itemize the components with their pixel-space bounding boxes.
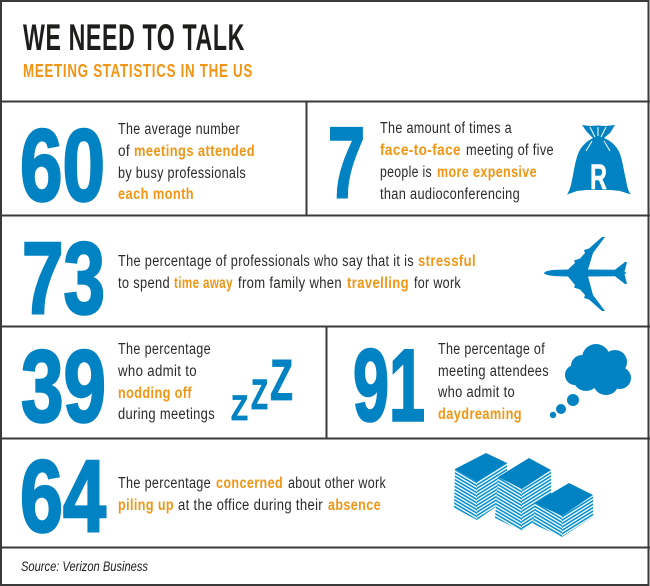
text block: The percentage of: [438, 341, 545, 358]
text block: concerned: [216, 475, 283, 492]
text block: absence: [328, 497, 381, 514]
text block: from family when: [238, 275, 342, 292]
text block: nodding off: [118, 385, 192, 402]
number 64: 64: [20, 440, 106, 554]
title: WE NEED TO TALK: [23, 17, 245, 58]
icon: thought cloud: [550, 344, 631, 418]
text block: [380, 120, 554, 203]
source note: Source: Verizon Business: [21, 558, 148, 574]
text block: [118, 121, 255, 203]
text block: [118, 253, 476, 292]
text block: who admit to: [117, 363, 197, 380]
text block: who admit to: [437, 384, 515, 401]
text block: daydreaming: [438, 406, 522, 423]
text block: piling up: [118, 497, 174, 514]
icon: zzz: Z: [270, 348, 293, 413]
text block: people is: [380, 164, 432, 181]
text block: of: [118, 143, 130, 160]
text block: The percentage: [118, 475, 211, 492]
text block: about other work: [288, 475, 386, 492]
text block: time away: [174, 275, 233, 292]
text block: face-to-face: [380, 142, 461, 159]
icon: money bag: R: [590, 158, 607, 197]
number 7: 7: [328, 107, 365, 219]
icon: zzz: Z: [231, 389, 248, 428]
text block: meeting of five: [466, 142, 554, 159]
text block: during meetings: [118, 406, 215, 423]
text block: [437, 341, 549, 423]
panel: 91 percent: [353, 328, 631, 442]
text block: The percentage: [118, 341, 211, 358]
text block: The amount of times a: [380, 120, 512, 137]
text block: [117, 341, 215, 423]
text block: meeting attendees: [438, 363, 549, 380]
text block: The average number: [118, 121, 240, 138]
icon: airplane: [544, 237, 627, 311]
text block: than audioconferencing: [380, 186, 520, 203]
text block: each month: [118, 186, 194, 203]
title: [23, 17, 253, 81]
number 73: 73: [22, 222, 105, 336]
number 39: 39: [21, 330, 106, 444]
panel: 73 percent: [22, 222, 627, 336]
panel: 39 percent: [21, 330, 293, 444]
icon: zzz: Z: [251, 371, 268, 419]
text block: to spend: [118, 275, 170, 292]
panel: 60 meetings: [20, 108, 255, 222]
icon: paper stacks: [454, 453, 593, 537]
icon: money bag: [567, 125, 631, 197]
text block: stressful: [418, 253, 476, 270]
icon: zzz: [231, 348, 293, 428]
number 60: 60: [20, 108, 105, 222]
panel: 7 times: [328, 107, 631, 219]
text block: The percentage of professionals who say that it is: [118, 253, 414, 270]
stack 1: [454, 453, 507, 520]
text block: [118, 475, 386, 514]
text block: meetings attended: [134, 143, 255, 160]
text block: at the office during their: [178, 497, 323, 514]
text block: more expensive: [437, 164, 537, 181]
stack 2: [495, 458, 551, 531]
text block: travelling: [347, 275, 409, 292]
text block: for work: [414, 275, 461, 292]
number 91: 91: [353, 328, 425, 442]
text block: by busy professionals: [118, 165, 246, 182]
stack 3: [533, 483, 593, 537]
subtitle: MEETING STATISTICS IN THE US: [23, 60, 253, 81]
panel: 64 percent: [20, 440, 593, 554]
